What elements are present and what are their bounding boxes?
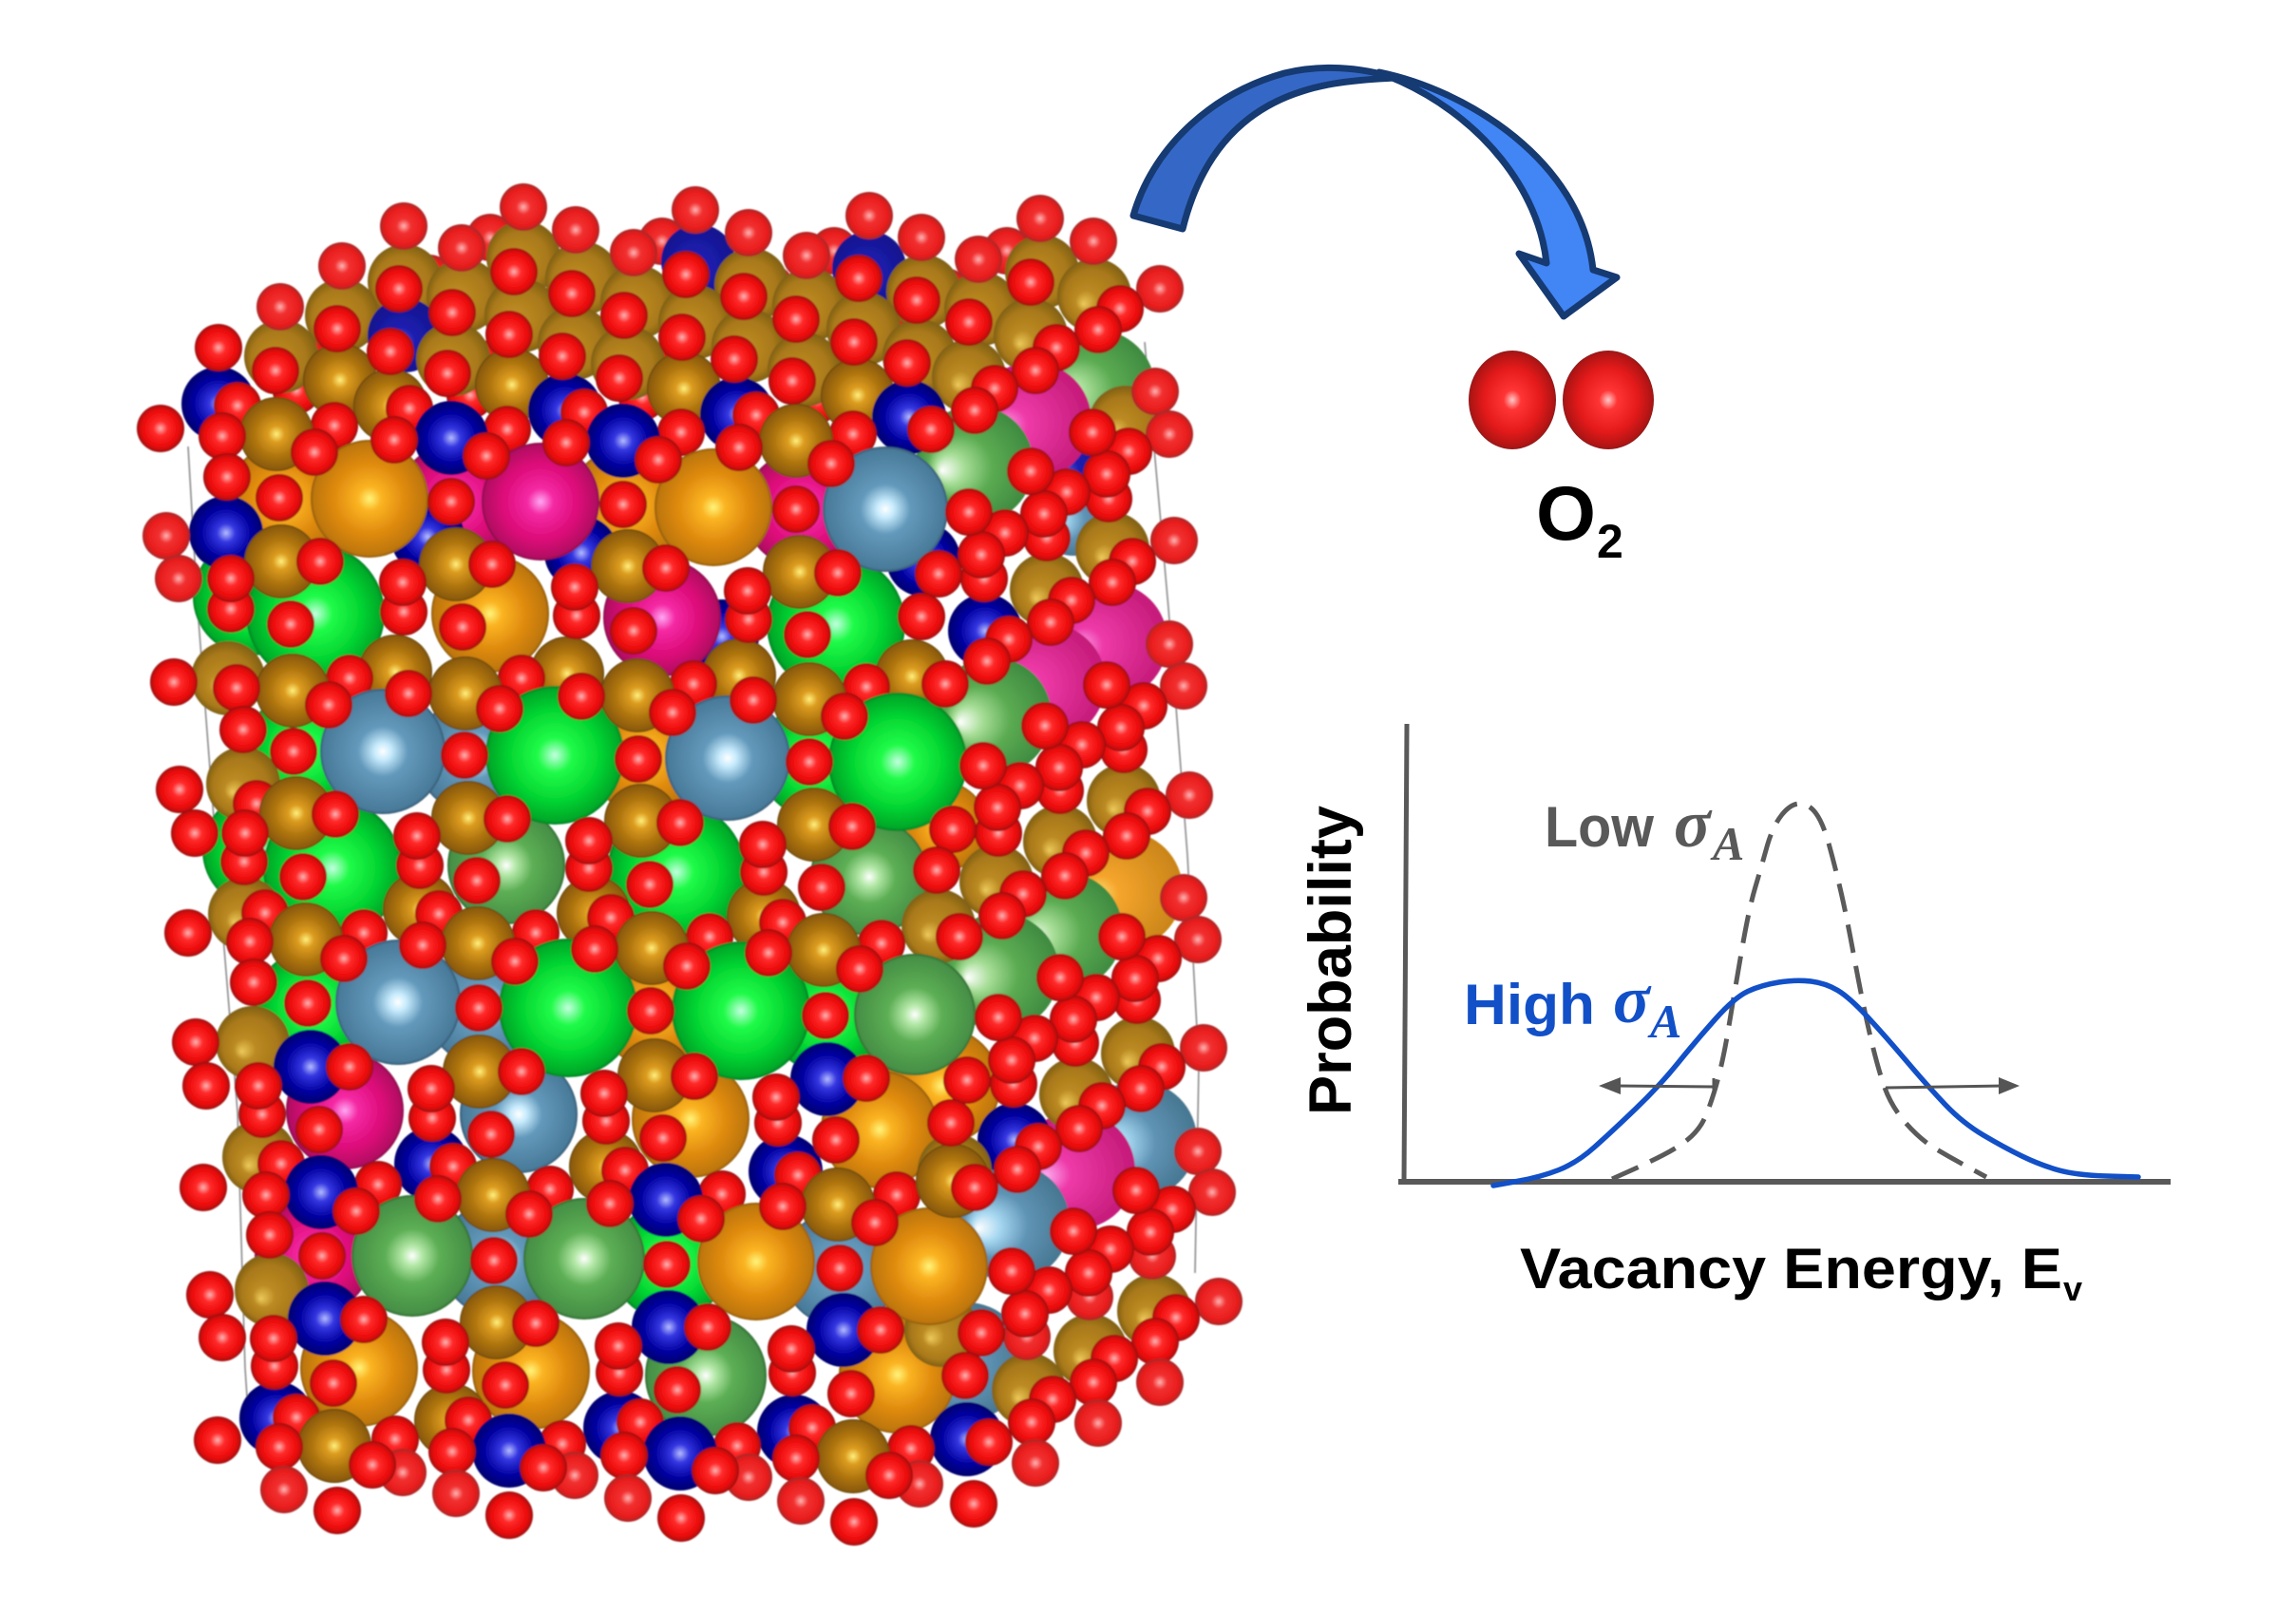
arrow tail segment bbox=[1133, 67, 1395, 229]
right spread arrow bbox=[1886, 1077, 2020, 1094]
deep background cations bbox=[193, 443, 960, 1327]
Low sigma symbol: A bbox=[1710, 817, 1744, 870]
x axis label: Vacancy Energy, E bbox=[1520, 1237, 2062, 1301]
High sigma label: High bbox=[1464, 973, 1595, 1036]
Low sigma symbol: σ bbox=[1674, 786, 1711, 862]
oxygen atoms on the right face bbox=[898, 285, 1243, 1528]
surface oxygen atoms on the top face bbox=[252, 248, 1054, 405]
left spread arrow bbox=[1599, 1077, 1714, 1094]
O2 label: 2 bbox=[1597, 515, 1623, 568]
probability distribution chart bbox=[1298, 724, 2171, 1308]
right face large cations bbox=[882, 330, 1197, 1420]
oxygen atoms hidden behind the top cations bbox=[273, 214, 1031, 424]
low sigma dashed curve bbox=[1612, 804, 1986, 1179]
Low sigma label: Low bbox=[1545, 795, 1654, 859]
high sigma solid curve bbox=[1493, 980, 2138, 1186]
oxygen atoms on the front face bbox=[199, 412, 913, 1546]
atomistic oxide slab bbox=[137, 183, 1243, 1546]
High sigma symbol: A bbox=[1647, 995, 1681, 1048]
unit cell lattice lines bbox=[188, 342, 1199, 1425]
arrow head segment bbox=[1379, 72, 1617, 316]
High sigma symbol: σ bbox=[1613, 961, 1650, 1037]
top and side cation layer bbox=[181, 220, 1191, 1476]
front row small cations bbox=[239, 397, 990, 1493]
O2 label: O bbox=[1536, 471, 1596, 557]
curved arrow from slab to O2 bbox=[1133, 67, 1617, 316]
y axis label: Probability bbox=[1298, 806, 1364, 1115]
partly hidden rear oxygen atoms bbox=[207, 382, 943, 1508]
outer surface oxygen atoms, top and left bbox=[137, 183, 1184, 1464]
y axis bbox=[1404, 724, 1407, 1182]
x axis label subscript: v bbox=[2063, 1269, 2082, 1308]
front row large cations bbox=[311, 440, 988, 1325]
rear row cations on the front face bbox=[246, 544, 957, 1436]
x axis bbox=[1398, 1179, 2171, 1185]
O2 molecule bbox=[1469, 351, 1654, 449]
